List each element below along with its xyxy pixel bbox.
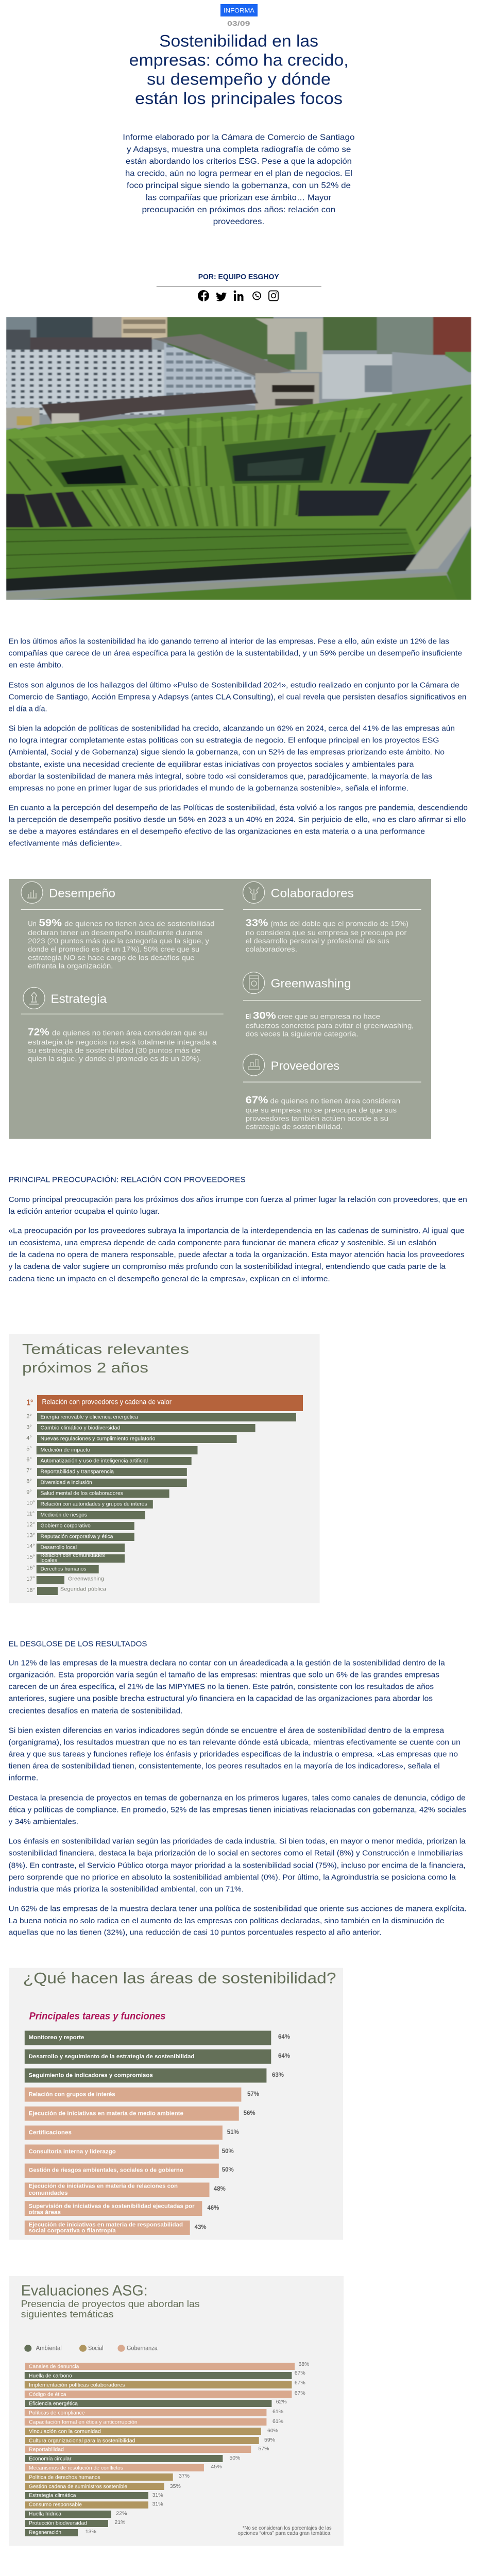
bar chart: tasks: 43%: [195, 2224, 207, 2230]
bar chart: ASG projects: 62%: [276, 2399, 287, 2405]
card: Estrategia: Estrategia: [50, 992, 107, 1006]
article text: introduction: obstante, existe una necesidad creciente de equilibrar estas iniciativas con proyectos sociales y ambientales para: [8, 761, 414, 769]
bar chart: ASG projects: Huella hídrica: [29, 2511, 61, 2517]
rank numbers: 7°: [26, 1468, 32, 1474]
bar chart: tasks: Seguimiento de indicadores y compromisos: [29, 2073, 153, 2079]
card: Proveedores: 67%: [246, 1095, 268, 1106]
article text: desglose: Los énfasis en sostenibilidad varían según las prioridades de cada industria. Si bien todas, en mayor o menor medida, priorizan la: [8, 1838, 466, 1846]
bar chart: ASG projects: Gestión cadena de suministros sostenible: [29, 2483, 127, 2489]
card: Desempeño: [21, 882, 224, 970]
bar chart: ASG projects: 50%: [229, 2455, 240, 2461]
card: Desempeño: de quienes no tienen área de sostenibilidad: [64, 920, 214, 928]
bar chart: tasks: 56%: [244, 2110, 255, 2116]
article text: introduction: En cuanto a la percepción del desempeño de las Políticas de sostenibilidad, ésta volvió a los rangos pre pandemia, descendiendo: [8, 804, 468, 812]
bar chart: ASG projects: Cultura organizacional para la sostenibilidad: [29, 2438, 135, 2444]
bar chart: ASG projects: Estrategia climática: [29, 2493, 76, 2499]
bar chart: ASG projects: Regeneración: [29, 2530, 61, 2536]
rank numbers: 2°: [26, 1414, 32, 1420]
card: Greenwashing: dos veces la siguiente categoría.: [246, 1030, 359, 1038]
bar chart: ASG projects: 67%: [295, 2380, 305, 2386]
panel: evaluaciones ASG: [9, 2276, 344, 2546]
rank numbers: 16°: [26, 1565, 35, 1571]
rank numbers: 8°: [26, 1479, 32, 1485]
bar chart: ranking: Derechos humanos: [40, 1566, 87, 1572]
bar chart: tasks: 64%: [278, 2034, 290, 2040]
bar chart: tasks: 48%: [214, 2186, 226, 2192]
section heading: principal preocupación: PRINCIPAL PREOCUPACIÓN: RELACIÓN CON PROVEEDORES: [8, 1176, 246, 1184]
card: Colaboradores: el desarrollo personal y profesional de sus: [246, 937, 389, 945]
bar chart: ASG projects: Consumo responsable: [29, 2502, 82, 2508]
panel: qué hacen las áreas de sostenibilidad: [9, 1968, 343, 2240]
bar chart: tasks: Ejecución de iniciativas en materia de medio ambiente: [29, 2111, 183, 2117]
bar chart: ASG projects: Capacitación formal en ética y anticorrupción: [29, 2419, 138, 2426]
bar chart: tasks: 46%: [207, 2205, 219, 2211]
base: [6, 554, 416, 591]
bar chart: tasks: Supervisión de iniciativas de sostenibilidad ejecutadas por: [29, 2204, 195, 2210]
rank numbers: 5°: [26, 1446, 32, 1452]
bar chart: tasks: Consultoría interna y liderazgo: [29, 2148, 116, 2155]
article text: desglose: [8, 1659, 467, 1937]
article text: desglose: Si bien existen diferencias en varios indicadores según dónde se encuentre el área de sostenibilidad dentro de la empresa: [8, 1727, 445, 1735]
card: Greenwashing: cree que su empresa no hace: [278, 1013, 380, 1021]
legend: Gobernanza: [127, 2345, 158, 2351]
bar chart: tasks: Relación con grupos de interés: [29, 2092, 115, 2098]
bar chart: ranking: Relación con proveedores y cadena de valor: [42, 1398, 172, 1405]
bar chart: ranking: Medición de riesgos: [40, 1512, 87, 1518]
intro text: preocupación en próximos dos años: relación con: [142, 206, 335, 214]
bar chart: ASG projects: 61%: [272, 2409, 283, 2415]
chart note: [237, 2526, 332, 2536]
intro text: están abordando los criterios ESG. Pese a que la adopción: [126, 157, 352, 166]
intro text: ha crecido, aún no logra permear en el plan de negocios. El: [125, 170, 352, 178]
legend: Ambiental: [36, 2345, 62, 2351]
article text: desglose: industria que más prioriza la sostenibilidad ambiental, con un 71%.: [8, 1886, 244, 1894]
legend: Social: [88, 2345, 104, 2351]
bar chart: ASG projects: [25, 2361, 309, 2536]
card: Proveedores: [243, 1054, 421, 1131]
chart note: opciones “otros” para cada gran temática.: [237, 2531, 332, 2536]
card: Estrategia: [21, 987, 224, 1063]
chart subheading: Presencia de proyectos que abordan las: [21, 2299, 200, 2309]
bar chart: tasks: 64%: [278, 2053, 290, 2059]
chart heading: Evaluaciones ASG:: [21, 2282, 148, 2299]
bar chart: ranking: Desarrollo local: [40, 1544, 77, 1550]
bar chart: ranking: Reportabilidad y transparencia: [40, 1468, 114, 1475]
bar chart: ranking: Diversidad e inclusión: [40, 1479, 92, 1485]
article text: desglose: aquellas que no las tienen (32%), una reducción de casi 10 puntos porcentuales respecto al año anterior.: [8, 1928, 381, 1937]
card: Desempeño: donde el promedio es de un 17%). 50% cree que su: [28, 945, 199, 953]
bar chart: ASG projects: 21%: [114, 2519, 125, 2526]
article text: desglose: ética y políticas de compliance. En promedio, 52% de las empresas tienen iniciativas relacionadas con gobernanza, 42% sociales: [8, 1806, 466, 1815]
rank numbers: 10°: [26, 1500, 35, 1506]
card: Desempeño: 59%: [39, 918, 62, 929]
rank numbers: 4°: [26, 1435, 32, 1442]
rank numbers: 12°: [26, 1522, 35, 1528]
rank numbers: 14°: [26, 1544, 35, 1550]
bar chart: tasks: [25, 2031, 290, 2235]
title: empresas: cómo ha crecido,: [129, 50, 349, 69]
bar chart: ASG projects: 61%: [272, 2418, 283, 2425]
bar chart: ASG projects: Huella de carbono: [29, 2373, 72, 2379]
category badge: [220, 4, 258, 16]
section heading: el desglose: EL DESGLOSE DE LOS RESULTADOS: [8, 1640, 147, 1649]
bar chart: ranking: Relación con comunidades: [40, 1552, 105, 1558]
bar chart: tasks: Monitoreo y reporte: [29, 2035, 84, 2041]
card: Greenwashing: 30%: [253, 1011, 276, 1022]
article text: proveedores: cadena tiene un impacto en el desempeño general de la empresa», explican en el informe.: [8, 1275, 330, 1283]
article text: proveedores: Como principal preocupación para los próximos dos años irrumpe con fuerza al primer lugar la relación con proveedores, que en: [8, 1196, 467, 1204]
bar chart: ASG projects: 67%: [295, 2390, 305, 2396]
bar chart: ranking: Energía renovable y eficiencia energética: [40, 1414, 138, 1420]
bar chart: tasks: 57%: [247, 2091, 259, 2097]
article text: desglose: Destaca la presencia de proyectos en temas de gobernanza en los primeros lugares, tales como canales de denuncia, código de: [8, 1794, 466, 1803]
bar chart: ASG projects: Vinculación con la comunidad: [29, 2429, 101, 2435]
hedge highlights and gaps: [9, 395, 471, 544]
bar chart: ranking: locales: [40, 1557, 57, 1563]
card: Estrategia: de quienes no tienen área consideran que su: [52, 1029, 207, 1037]
intro text: y Adapsys, muestra una completa radiografía de cómo se: [127, 145, 351, 154]
hero photo: aerial view of green hedge-covered building: [6, 317, 471, 600]
card: Colaboradores: (más del doble que el promedio de 15%): [270, 920, 408, 928]
article text: introduction: se debe a mayores estándares en el desempeño efectivo de las organizaciones en esta materia o a una performance: [8, 828, 425, 836]
bar chart: tasks: 50%: [222, 2167, 234, 2173]
bar chart: ASG projects: Economía circular: [29, 2455, 72, 2462]
card: Estrategia: su estrategia de sostenibilidad (30 puntos más de: [28, 1047, 200, 1055]
article text: desglose: Un 12% de las empresas de la muestra declara no contar con un áreadedicada a la gestión de la sostenibilidad dentro de la: [8, 1659, 446, 1668]
category badge: INFORMA: [224, 7, 254, 14]
bar chart: tasks: social corporativa o filantropía: [29, 2228, 116, 2234]
bar chart: tasks: Ejecución de iniciativas en materia de responsabilidad: [29, 2222, 183, 2228]
bar chart: ASG projects: 31%: [152, 2501, 163, 2507]
bar chart: ASG projects: 13%: [86, 2529, 96, 2535]
bar chart: ASG projects: Implementación políticas colaboradores: [29, 2382, 125, 2388]
article text: desglose: informe.: [8, 1774, 38, 1783]
article text: desglose: tienen área de sostenibilidad tienen, consistentemente, los peores resultados en la mayoría de los indicadores», señala el: [8, 1762, 440, 1771]
bar chart: ranking: Relación con autoridades y grupos de interés: [40, 1501, 147, 1507]
card: Greenwashing: El: [246, 1013, 251, 1021]
bar chart: ASG projects: Código de ética: [29, 2392, 66, 2398]
bar chart: tasks: comunidades: [29, 2190, 68, 2196]
bar chart: ASG projects: 57%: [259, 2446, 269, 2452]
card: Colaboradores: no considera que su empresa se preocupa por: [246, 929, 407, 937]
intro text: proveedores.: [213, 217, 264, 226]
bar chart: tasks: Certificaciones: [29, 2130, 72, 2136]
article text: introduction: empresas no pone en primer lugar de sus prioridades el mundo de la gobernanza sostenible», señala el informe.: [8, 784, 408, 792]
rank numbers: [26, 1414, 35, 1594]
title: Sostenibilidad en las: [159, 31, 318, 50]
bar chart: tasks: Gestión de riesgos ambientales, sociales o de gobierno: [29, 2167, 183, 2174]
bar chart: tasks: 51%: [227, 2129, 239, 2136]
chart subheading: siguientes temáticas: [21, 2309, 114, 2319]
bar chart: ranking: Seguridad pública: [60, 1586, 106, 1592]
article text: proveedores: y la cadena de valor sugiere un compromiso más profundo con la sostenibilidad integral, entendiendo que cada parte de la: [8, 1263, 446, 1271]
article text: introduction: el día a día.: [8, 705, 47, 714]
chart note: *No se consideran los porcentajes de las: [243, 2526, 332, 2531]
article text: desglose: pero sorprende que no priorice en absoluto la sostenibilidad ambiental (0%). Por último, la Agroindustria se posiciona como la: [8, 1874, 456, 1882]
greenery base: [6, 384, 471, 582]
article text: introduction: Estos son algunos de los hallazgos del último «Pulso de Sostenibilidad 2024», estudio realizado en conjunto por la Cámara de: [8, 682, 459, 690]
card: Desempeño: declaran tener un desempeño insuficiente durante: [28, 929, 202, 937]
article text: proveedores: de la cadena no opera de manera responsable, puede afectar a toda la organización. Esta mayor atención hacia los proveedores: [8, 1251, 465, 1259]
bar chart: ranking: [26, 1395, 303, 1595]
bar chart: ASG projects: 22%: [116, 2511, 127, 2517]
bar chart: tasks: Ejecución de iniciativas en materia de relaciones con: [29, 2183, 178, 2190]
bar chart: ASG projects: Protección biodiversidad: [29, 2520, 87, 2527]
card: Proveedores: de quienes no tienen área consideran: [270, 1097, 400, 1105]
bar chart: ranking: Gobierno corporativo: [40, 1522, 91, 1529]
card: Estrategia: 72%: [28, 1027, 49, 1038]
article text: proveedores: [8, 1196, 467, 1283]
intro text: las compañías que priorizan ese ámbito… Mayor: [146, 193, 332, 202]
bar chart: ASG projects: 67%: [295, 2370, 305, 2376]
card: Desempeño: 2023 (20 puntos más que la categoría que la sigue, y: [28, 937, 209, 945]
chart heading: Temáticas relevantes: [22, 1341, 189, 1357]
chart heading: próximos 2 años: [22, 1360, 148, 1376]
article text: desglose: organización. Esta proporción varía según el tamaño de las empresas: mientras que solo un 6% de las grandes empresas: [8, 1671, 439, 1680]
panel: key findings: [9, 879, 431, 1139]
title: están los principales focos: [135, 89, 343, 108]
bar chart: ASG projects: Canales de denuncia: [29, 2364, 79, 2370]
intro text: [123, 133, 355, 226]
rank numbers: 3°: [26, 1425, 32, 1431]
bar chart: ASG projects: Reportabilidad: [29, 2446, 64, 2452]
article text: proveedores: la edición anterior ocupaba el quinto lugar.: [8, 1208, 160, 1216]
title: su desempeño y dónde: [147, 70, 331, 89]
bar chart: ASG projects: 59%: [264, 2437, 275, 2443]
bar chart: tasks: Desarrollo y seguimiento de la estrategia de sostenibilidad: [29, 2054, 195, 2060]
bar chart: tasks: otras áreas: [29, 2209, 61, 2215]
rank numbers: 11°: [26, 1511, 35, 1517]
bar chart: ASG projects: 31%: [152, 2492, 163, 2498]
chart subheading: [21, 2299, 200, 2319]
article text: introduction: Comercio de Santiago, Acción Empresa y Adapsys (antes CLA Consulting), el cual revela que persisten desafíos significativos en: [8, 693, 466, 702]
article text: desglose: sostenibilidad financiera, destaca la baja priorización de lo social en sectores como el Retail (8%) y Construcción e Inmobiliarias: [8, 1850, 463, 1858]
chart heading: [22, 1341, 189, 1376]
card: Greenwashing: Greenwashing: [271, 977, 351, 990]
bar chart: ranking: Reputación corporativa y ética: [40, 1533, 113, 1539]
article text: proveedores: un ecosistema, una empresa depende de cada componente para funcionar de manera eficaz y sostenible. Si un eslabón: [8, 1239, 436, 1247]
intro text: foco principal sigue siendo la gobernanza, con un 52% de: [127, 181, 351, 190]
article text: introduction: no logra integrar completamente estas políticas con su estrategia de negocio. El enfoque principal en los proyectos ESG: [8, 737, 439, 745]
article text: desglose: y 34% ambientales.: [8, 1818, 78, 1826]
subheading: Principales tareas y funciones: [29, 2011, 165, 2022]
date: 03/09: [227, 20, 250, 27]
intro text: Informe elaborado por la Cámara de Comercio de Santiago: [123, 133, 355, 142]
rank numbers: 9°: [26, 1489, 32, 1496]
article text: introduction: efectivamente más deficiente».: [8, 840, 122, 848]
card: Estrategia: quien la sigue, y donde el promedio es de un 20%).: [28, 1055, 201, 1063]
bar chart: ASG projects: 35%: [170, 2483, 181, 2489]
hollows: [46, 455, 138, 487]
bar chart: ASG projects: 45%: [211, 2464, 222, 2470]
rank numbers: 15°: [26, 1554, 35, 1561]
bar chart: ASG projects: 68%: [298, 2361, 309, 2367]
bar chart: ranking: Cambio climático y biodiversidad: [40, 1425, 121, 1431]
card: Proveedores: estrategia de sostenibilidad.: [246, 1123, 343, 1131]
bar chart: ranking: 1°: [26, 1399, 33, 1408]
bar chart: ASG projects: 60%: [267, 2428, 278, 2434]
article text: introduction: la percepción de desempeño positivo desde un 56% en 2023 a un 40% en 2024. Sin perjuicio de ello, «no es claro afirmar si ello: [8, 816, 466, 824]
article text: desglose: (8%). En contraste, el Servicio Público otorga mayor prioridad a la sostenibilidad social (75%), incluso por encima de la financiera,: [8, 1862, 466, 1870]
card: Proveedores: que su empresa no se preocupa de que sus: [246, 1107, 397, 1114]
card: Desempeño: enfrenta la organización.: [28, 962, 113, 970]
article text: proveedores: «La preocupación por los proveedores subraya la importancia de la interdependencia en las cadenas de suministro. Al igual que: [8, 1227, 465, 1235]
rank numbers: 17°: [26, 1576, 35, 1582]
article text: desglose: La buena noticia no solo radica en el aumento de las empresas con políticas declaradas, sino también en la disminución de: [8, 1917, 444, 1925]
article text: desglose: (organigrama), los resultados muestran que no es tan relevante dónde está ubicada, mientras efectivamente se cuente con un: [8, 1739, 461, 1747]
rank numbers: 18°: [26, 1587, 35, 1594]
title: [129, 31, 349, 108]
card: Proveedores: proveedores también actúen acorde a su: [246, 1115, 388, 1123]
panel: temáticas relevantes chart: [9, 1334, 320, 1603]
article text: introduction: Si bien la adopción de políticas de sostenibilidad ha crecido, alcanzando un 62% en 2024, cerca del 41% de las empresas aún: [8, 725, 455, 733]
card: Colaboradores: Colaboradores: [271, 887, 354, 900]
bar chart: ranking: Medición de impacto: [40, 1447, 90, 1453]
card: Greenwashing: esfuerzos concretos para evitar el greenwashing,: [246, 1022, 414, 1030]
rank numbers: 13°: [26, 1533, 35, 1539]
author byline: POR: EQUIPO ESGHOY: [198, 273, 279, 281]
bar chart: ranking: Salud mental de los colaboradores: [40, 1490, 123, 1496]
article text: desglose: crecientes desafíos en materia de sostenibilidad.: [8, 1707, 183, 1716]
article text: introduction: (Ambiental, Social y de Gobernanza) sigue siendo la gobernanza, con un 52% de las empresas priorizando este ámbito. No: [8, 749, 445, 757]
bar chart: ASG projects: Políticas de compliance: [29, 2410, 85, 2416]
article text: desglose: Un 62% de las empresas de la muestra declara tener una política de sostenibilidad que oriente sus acciones de manera explícita.: [8, 1905, 467, 1913]
card: Estrategia: estrategia de negocios no está totalmente integrada a: [28, 1038, 217, 1046]
bar chart: ranking: Greenwashing: [68, 1575, 104, 1582]
bar chart: tasks: 50%: [222, 2148, 234, 2155]
bar chart: ranking: Nuevas regulaciones y cumplimiento regulatorio: [40, 1435, 156, 1442]
article text: desglose: anteriores, sugiere una posible brecha estructural y/o financiera en la capacidad de las organizaciones para abordar los: [8, 1695, 433, 1703]
card: Desempeño: Un: [28, 920, 37, 928]
card: Proveedores: Proveedores: [271, 1059, 339, 1073]
article text: introduction: en este ámbito.: [8, 661, 63, 669]
card: Colaboradores: colaboradores.: [246, 945, 297, 953]
article text: desglose: área y que sus tareas y funciones refleje los énfasis y prioridades específicas de la industria o empresa. «Las empresas que no: [8, 1751, 458, 1759]
article text: desglose: carecen de un área específica, el 21% de las MIPYMES no la tienen. Este patrón, consistente con los resultados de años: [8, 1683, 434, 1691]
legend: [24, 2345, 158, 2352]
bar chart: ASG projects: 37%: [179, 2473, 190, 2479]
bar chart: ASG projects: Mecanismos de resolución de conflictos: [29, 2465, 123, 2471]
chart heading: ¿Qué hacen las áreas de sostenibilidad?: [23, 1970, 336, 1987]
social share icons: [198, 290, 278, 301]
card: Colaboradores: [243, 882, 421, 953]
article text: introduction: En los últimos años la sostenibilidad ha ido ganando terreno al interior de las empresas. Pese a ello, aún existe un 12% de las: [8, 637, 449, 646]
card: Colaboradores: 33%: [246, 918, 268, 929]
article text: introduction: compañías que carece de un área específica para la gestión de la sustentabilidad, y un 59% percibe un desempeño insuficiente: [8, 649, 462, 657]
bar chart: ASG projects: Política de derechos humanos: [29, 2474, 100, 2480]
article text: introduction: abordar la sostenibilidad de manera más integral, sobre todo «si consideramos que, paradójicamente, la mayoría de las: [8, 772, 432, 781]
card: Desempeño: estrategia NO se hace cargo de los desafíos que: [28, 954, 195, 961]
card: Desempeño: Desempeño: [49, 887, 115, 900]
bar chart: ASG projects: Eficiencia energética: [29, 2401, 78, 2407]
card: Greenwashing: [243, 972, 421, 1038]
article text: introduction: [8, 637, 468, 848]
bar chart: ranking: Automatización y uso de inteligencia artificial: [40, 1458, 148, 1464]
bar chart: tasks: 63%: [272, 2072, 284, 2078]
rank numbers: 6°: [26, 1457, 32, 1463]
